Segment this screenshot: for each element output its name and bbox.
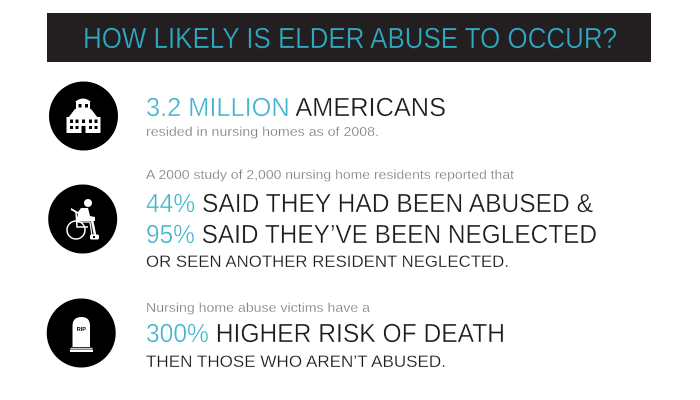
note: residents as of 2008: resided in nursing homes as of 2008. — [146, 124, 379, 139]
icon: RIP tombstone: RIP — [77, 327, 86, 333]
intro: abuse victims: Nursing home abuse victims have a — [146, 300, 371, 315]
title: HOW LIKELY IS ELDER ABUSE TO OCCUR? — [83, 23, 617, 55]
icon: RIP tombstone — [47, 298, 116, 368]
stat: 3.2 million Americans: 3.2 MILLION AMERICANS — [146, 94, 446, 122]
stat: 300% higher risk: 300% HIGHER RISK OF DEATH — [146, 320, 505, 348]
title banner — [47, 13, 651, 62]
icon: wheelchair — [48, 184, 117, 254]
icon: nursing home building — [49, 82, 118, 150]
note: then those not abused: THEN THOSE WHO AREN’T ABUSED. — [146, 353, 446, 371]
intro: 2000 study: A 2000 study of 2,000 nursing home residents reported that — [146, 167, 514, 182]
stat: 44% abused: 44% SAID THEY HAD BEEN ABUSED & — [146, 190, 593, 218]
note: or seen another resident neglected: OR SEEN ANOTHER RESIDENT NEGLECTED. — [146, 253, 509, 271]
stat: 95% neglected: 95% SAID THEY’VE BEEN NEGLECTED — [146, 221, 597, 249]
